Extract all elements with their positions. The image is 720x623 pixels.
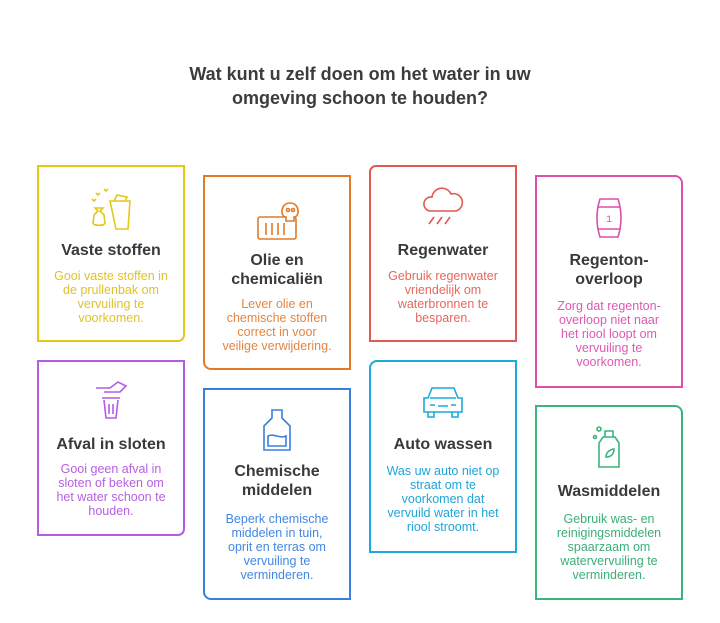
icon: detergent <box>592 426 620 468</box>
heading: Regenwater <box>398 242 488 259</box>
panel: wasmiddelen <box>535 405 683 600</box>
panel: vaste stoffen <box>37 165 185 342</box>
icon: barrel skull <box>257 202 299 240</box>
title: Wat kunt u zelf doen om het water in uw <box>189 64 531 84</box>
text: Gooi vaste stoffen in de prullenbak om vervuiling te voorkomen. <box>54 269 168 325</box>
heading: Auto wassen <box>394 436 492 453</box>
panel: regenton-overloop <box>535 175 683 388</box>
text: Beperk chemische middelen in tuin, oprit en terras om vervuiling te verminderen. <box>226 512 328 582</box>
heading: Chemische <box>234 463 320 480</box>
panel: chemische middelen <box>203 388 351 600</box>
icon: bottle <box>263 409 291 451</box>
text: Gooi geen afval in sloten of beken om het water schoon te houden. <box>56 462 166 518</box>
heading: Vaste stoffen <box>61 242 161 259</box>
heading: middelen <box>242 482 312 499</box>
title <box>189 64 531 108</box>
text: Gebruik regenwater vriendelijk om waterbronnen te besparen. <box>388 269 498 325</box>
icon: rain cloud <box>423 187 464 224</box>
panel: regenwater <box>369 165 517 342</box>
heading <box>231 252 323 288</box>
heading <box>234 463 320 499</box>
icon: car <box>423 387 463 418</box>
text: Gebruik was- en reinigingsmiddelen spaarzaam om watervervuiling te verminderen. <box>557 512 661 582</box>
heading: overloop <box>575 271 643 288</box>
text: Was uw auto niet op straat om te voorkomen dat vervuild water in het riool stroomt. <box>387 464 499 534</box>
heading: Afval in sloten <box>56 436 166 453</box>
panel: auto wassen <box>369 360 517 553</box>
heading: Olie en <box>250 252 304 269</box>
icon: hand bin <box>96 381 128 419</box>
heading: Wasmiddelen <box>558 483 660 500</box>
panel: olie en chemicalien <box>203 175 351 370</box>
text: Lever olie en chemische stoffen correct in voor veilige verwijdering. <box>222 297 332 353</box>
icon: barrel: 1 <box>606 215 612 226</box>
heading: Regenton- <box>569 252 649 269</box>
icon: trash <box>92 188 131 230</box>
icon: barrel <box>596 198 622 238</box>
title: omgeving schoon te houden? <box>232 88 488 108</box>
heading: chemicaliën <box>231 271 323 288</box>
heading <box>569 252 649 288</box>
text: Zorg dat regenton-overloop niet naar het riool loopt om vervuiling te voorkomen. <box>557 299 661 369</box>
panel: afval in sloten <box>37 360 185 536</box>
